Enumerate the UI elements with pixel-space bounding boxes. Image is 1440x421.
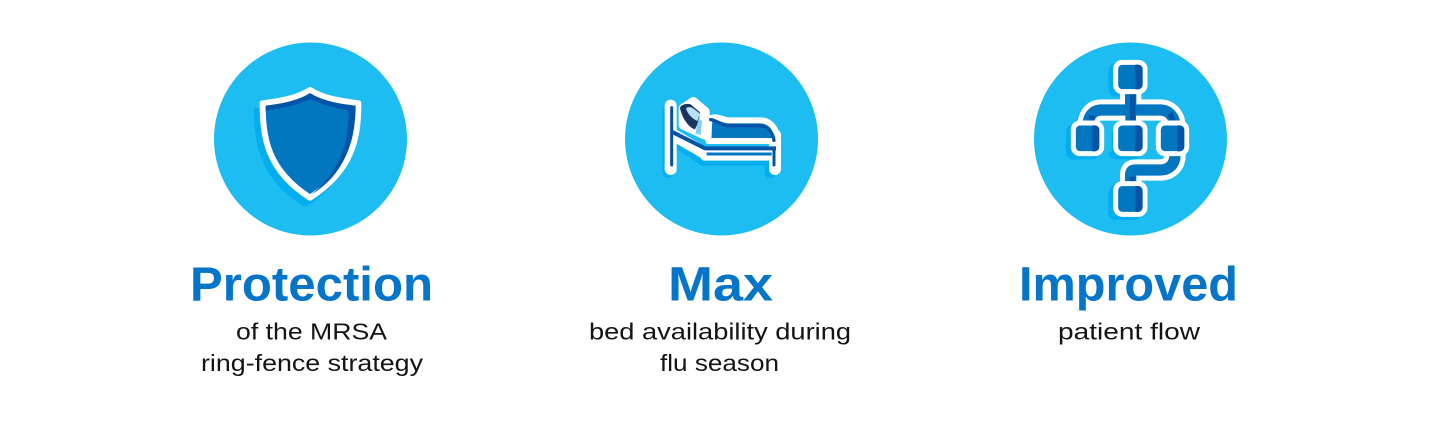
- heading: Improved: Improved: [1019, 258, 1238, 312]
- bed rails: [667, 108, 676, 165]
- heading: Max: Max: [668, 258, 773, 312]
- text: patient flow: patient flow: [1058, 318, 1200, 344]
- flow connectors outline: [1088, 78, 1175, 195]
- text: of the MRSA ring-fence strategy: of the MRSA: [236, 318, 388, 344]
- text: bed availability during flu season: [589, 318, 851, 376]
- box shading: [1092, 65, 1184, 212]
- patient head: [680, 104, 700, 129]
- icon: shield in circle: [214, 42, 407, 236]
- flow boxes: [1073, 62, 1187, 214]
- panel: max: [589, 42, 851, 376]
- branch cutouts: [1103, 123, 1116, 152]
- panel: improved: [1019, 42, 1238, 344]
- text: bed availability during flu season: flu season: [660, 350, 779, 376]
- text: of the MRSA ring-fence strategy: ring-fence strategy: [201, 350, 424, 376]
- text: bed availability during flu season: bed availability during: [589, 318, 851, 344]
- icon: patient in bed in circle: [625, 42, 818, 236]
- heading: Protection: Protection: [190, 258, 433, 312]
- text: of the MRSA ring-fence strategy: [201, 318, 424, 376]
- bed frame outline: [671, 106, 775, 169]
- panel: protection: [190, 42, 433, 376]
- mattress: [708, 117, 777, 141]
- bed shadow: [668, 110, 773, 172]
- icon: flow chart in circle: [1034, 42, 1227, 236]
- flow shadow: [1066, 63, 1142, 220]
